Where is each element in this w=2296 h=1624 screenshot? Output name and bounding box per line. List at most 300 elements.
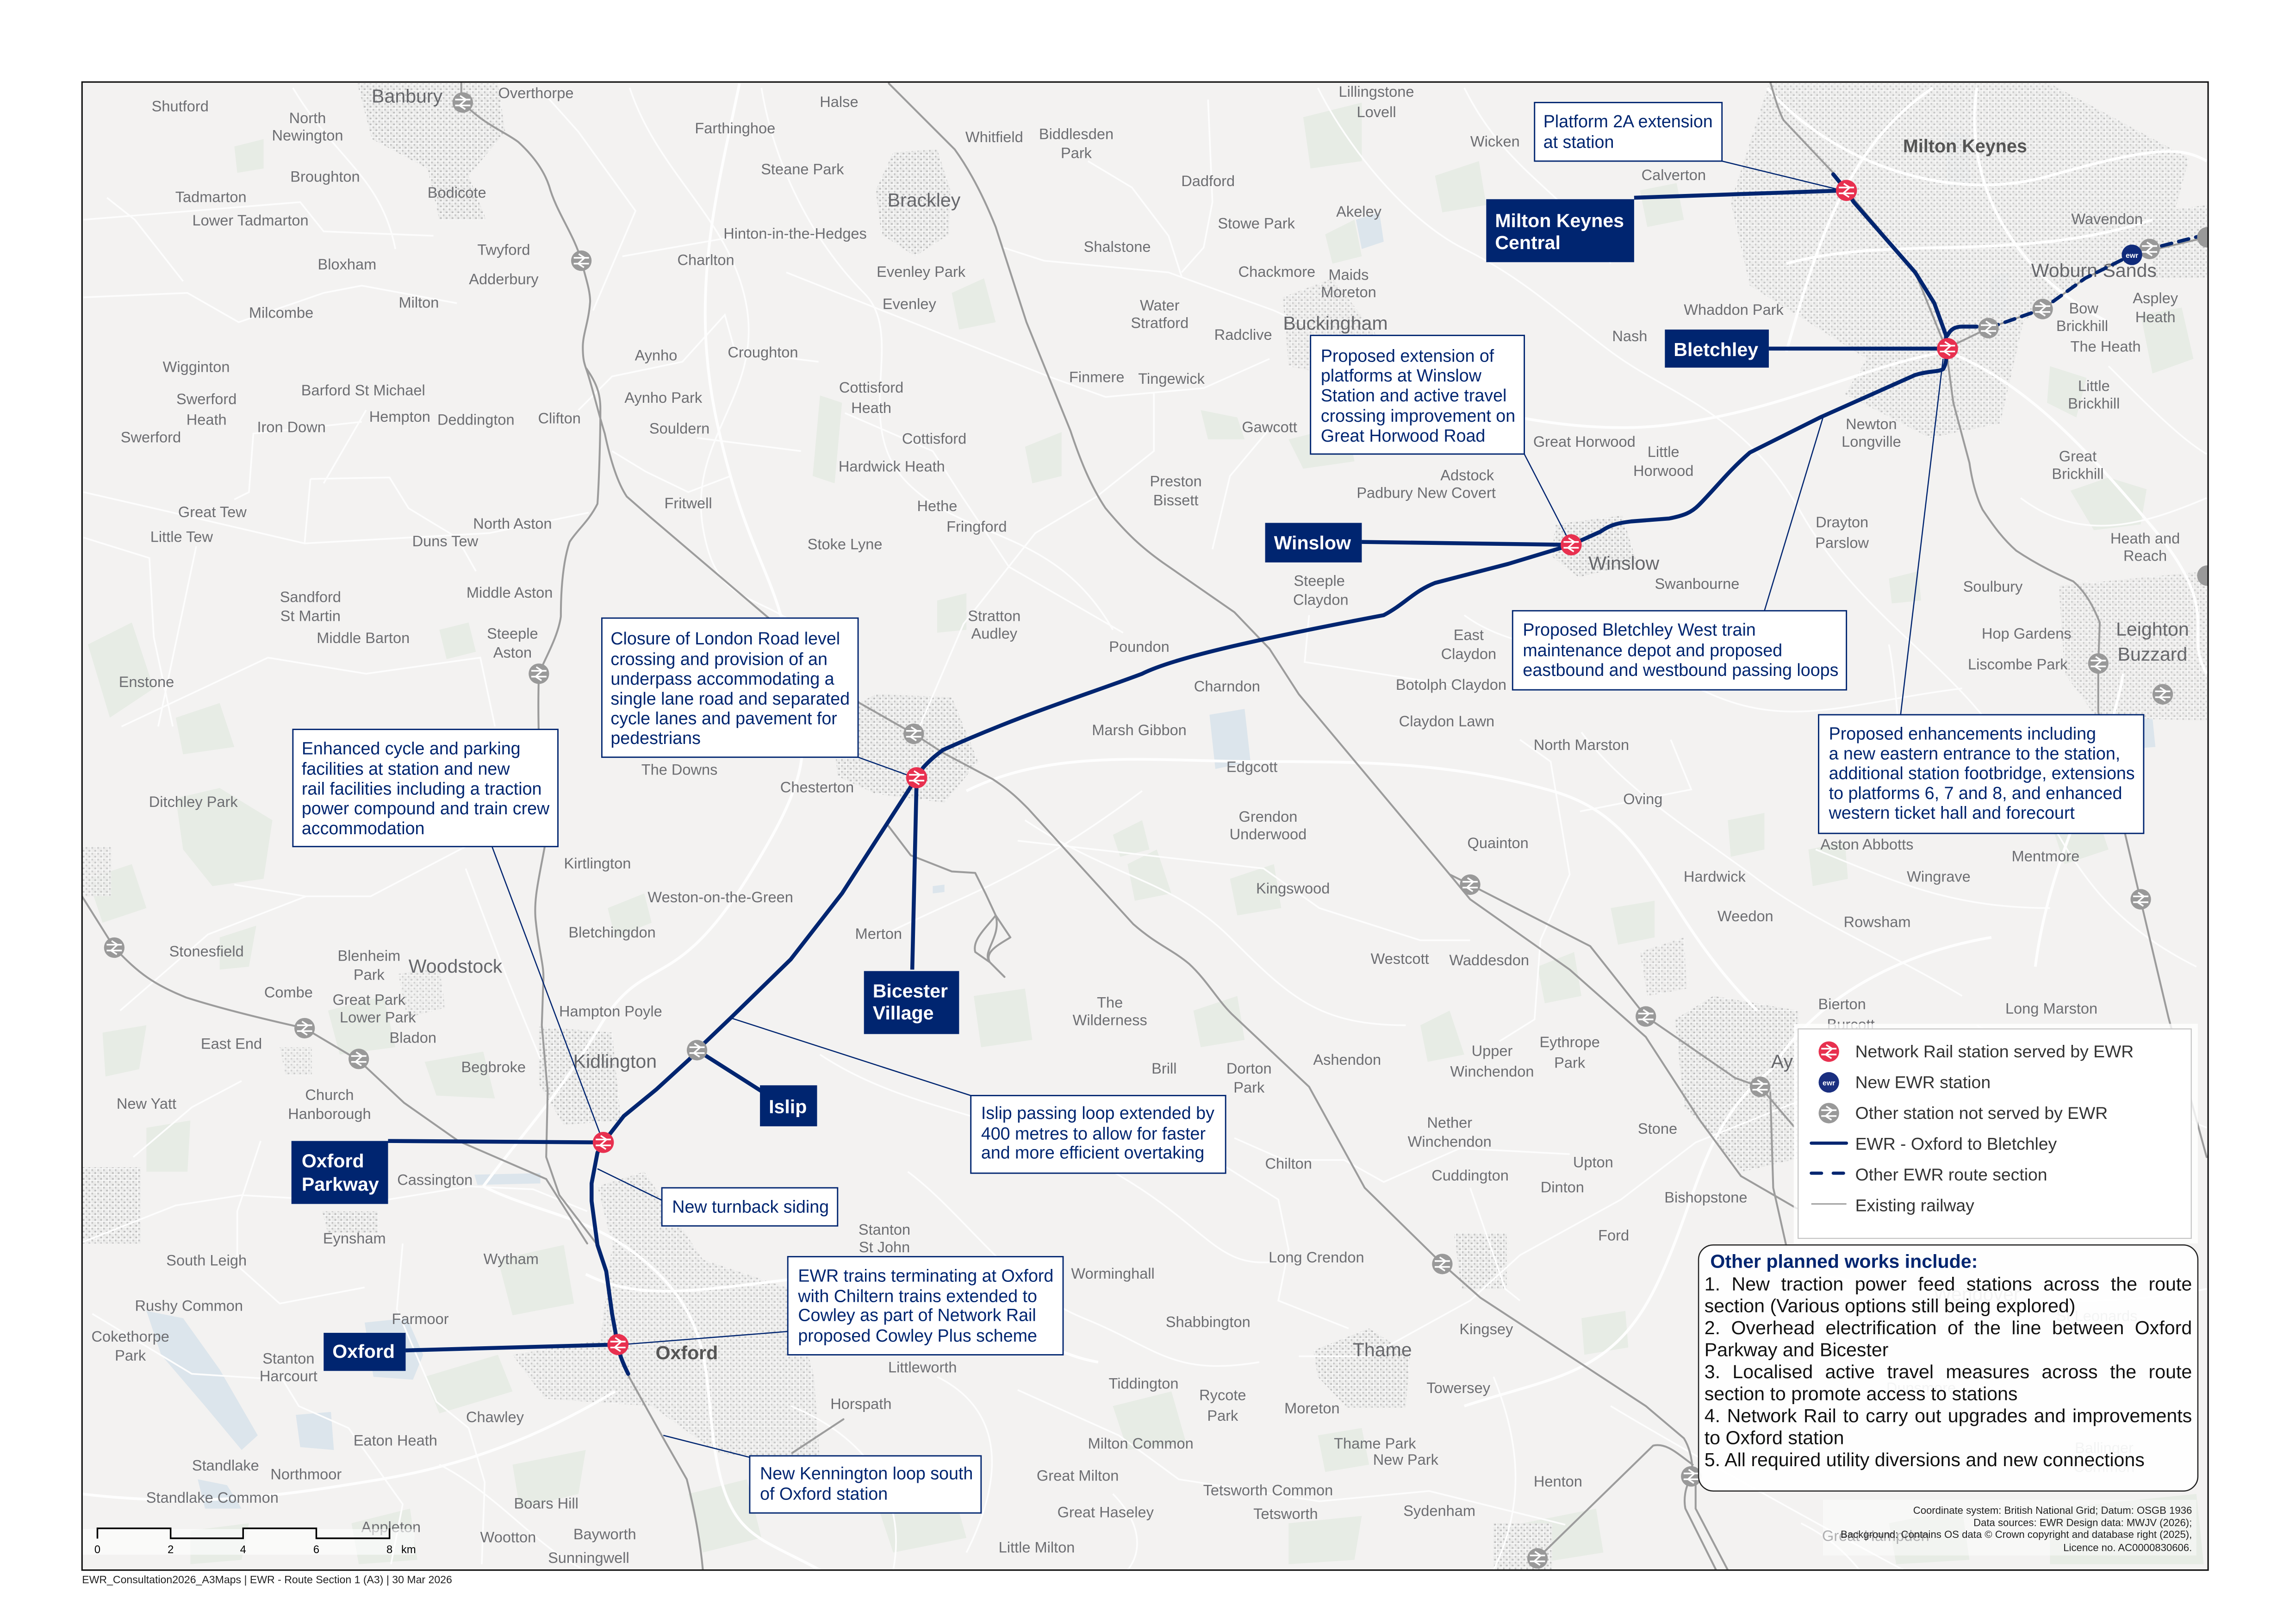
place labels: Oxford <box>656 1342 718 1363</box>
planned works list: section to promote access to stations <box>1705 1383 2017 1405</box>
place labels: Standlake Common <box>146 1489 279 1506</box>
place labels: Adstock <box>1440 467 1494 484</box>
place labels: Wilderness <box>1073 1012 1147 1029</box>
place labels: Sunningwell <box>548 1549 629 1566</box>
callout: Bletchley enhancements: to platforms 6, 7 and 8, and enhanced <box>1829 783 2122 803</box>
place labels: Underwood <box>1230 826 1307 843</box>
place labels: Shutford <box>152 98 209 114</box>
scale bar: 0 <box>94 1544 100 1556</box>
place labels: Sandford <box>280 588 341 605</box>
place labels: Grendon <box>1239 808 1297 825</box>
place labels: Aston <box>493 644 532 661</box>
place labels: Heath <box>2135 309 2176 325</box>
callout: London Road crossing: crossing and provision of an <box>610 649 828 668</box>
place labels: Steane Park <box>761 161 844 177</box>
place labels: Padbury New Covert <box>1356 485 1496 501</box>
place labels: Wigginton <box>163 359 230 375</box>
place labels: Bodicote <box>428 184 486 201</box>
place labels: South Leigh <box>166 1252 247 1269</box>
place labels: Aston Abbotts <box>1820 836 1913 853</box>
place labels: North <box>289 110 326 126</box>
callout: Kennington loop <box>750 1456 981 1513</box>
station label: Bicester Village <box>864 971 959 1034</box>
place labels: Cassington <box>397 1171 473 1188</box>
place labels: Dorton <box>1226 1060 1272 1077</box>
place labels: Barford St Michael <box>301 382 425 399</box>
callout: Bletchley enhancements <box>1819 715 2144 833</box>
callout: Winslow works <box>1311 336 1524 454</box>
place labels: Liscombe Park <box>1968 656 2068 673</box>
callout: Bletchley enhancements: Proposed enhancements including <box>1829 724 2096 743</box>
place labels: St Martin <box>280 607 341 624</box>
faint labels under panels: Wendover <box>1934 1283 2020 1305</box>
planned works list: 3. Localised active travel measures across the route <box>1705 1361 2192 1382</box>
place labels: Woburn Sands <box>2031 260 2157 281</box>
place labels: Shabbington <box>1166 1313 1251 1330</box>
place labels: Milcombe <box>249 305 313 321</box>
station label: Islip <box>760 1085 817 1126</box>
place labels: Woodstock <box>409 956 503 977</box>
place labels: Stanton <box>859 1221 910 1238</box>
place labels: Brackley <box>888 189 961 211</box>
place labels: Soulbury <box>1963 578 2023 595</box>
place labels: Stratford <box>1131 315 1188 331</box>
callout: Oxford Parkway facilities: rail facilities including a traction <box>302 779 541 798</box>
scale bar: 4 <box>240 1544 246 1556</box>
callout: Bletchley enhancements: additional station footbridge, extensions <box>1829 763 2135 783</box>
place labels: Twyford <box>477 241 530 258</box>
leader lines <box>492 161 1943 1457</box>
legend item: new EWR station: ewr <box>1823 1079 1835 1087</box>
place labels: Cuddington <box>1431 1167 1509 1184</box>
callout: London Road crossing <box>602 618 858 757</box>
station label: Milton Keynes Central: Central <box>1495 232 1561 253</box>
place labels: East <box>1454 627 1484 643</box>
place labels: Great Horwood <box>1533 433 1636 450</box>
place labels: Gawcott <box>1242 418 1297 435</box>
place labels: Great Milton <box>1037 1468 1119 1484</box>
place labels: Finmere <box>1069 369 1125 386</box>
callout: London Road crossing: single lane road and separated <box>610 689 850 708</box>
place labels: East End <box>201 1035 262 1052</box>
place labels: Tetsworth Common <box>1203 1482 1333 1499</box>
place labels: Weston-on-the-Green <box>647 889 793 906</box>
place labels: Poundon <box>1109 638 1170 655</box>
place labels: Eythrope <box>1539 1034 1600 1050</box>
callout: London Road crossing: cycle lanes and pavement for <box>610 708 837 728</box>
callout: London Road crossing: pedestrians <box>610 728 701 748</box>
panel: other planned works <box>1699 1245 2198 1491</box>
place labels: Enstone <box>119 674 174 690</box>
callout: Oxford Parkway facilities <box>293 730 558 847</box>
place labels: Buzzard <box>2117 643 2187 665</box>
legend item: other station: Other station not served by EWR <box>1855 1103 2108 1123</box>
place labels: Thame <box>1353 1339 1412 1361</box>
place labels: Newington <box>272 127 343 144</box>
map credits: Data sources: EWR Design data: MWJV (2026); <box>1973 1517 2192 1529</box>
station label: Winslow: Winslow <box>1274 532 1351 553</box>
place labels: Biddlesden <box>1039 126 1114 143</box>
callout: Bletchley enhancements: a new eastern entrance to the station, <box>1829 743 2120 763</box>
callout: London Road crossing: Closure of London Road level <box>610 629 840 648</box>
callout: Oxford Parkway facilities: Enhanced cycle and parking <box>302 738 521 758</box>
place labels: St John <box>859 1239 910 1255</box>
place labels: Akeley <box>1336 203 1382 220</box>
place labels: Little Tew <box>150 529 213 545</box>
planned works list: 4. Network Rail to carry out upgrades and improvements <box>1705 1405 2192 1427</box>
station label: Bletchley <box>1665 330 1769 368</box>
place labels: Bayworth <box>573 1526 636 1543</box>
place labels: Kidlington <box>573 1050 657 1072</box>
place labels: Botolph Claydon <box>1396 676 1506 693</box>
place labels: Great Park <box>333 991 406 1008</box>
place labels: Banbury <box>372 85 443 106</box>
callout: Islip loop <box>971 1096 1226 1173</box>
place labels: Kingswood <box>1256 880 1330 897</box>
station label: Oxford Parkway: Parkway <box>302 1174 379 1195</box>
station label: Islip: Islip <box>769 1096 807 1117</box>
place labels: Heath and <box>2110 530 2180 547</box>
place labels: Wicken <box>1470 133 1520 150</box>
place labels: Farmoor <box>392 1311 449 1327</box>
place labels: Waddesdon <box>1449 952 1529 968</box>
station label: Oxford Parkway <box>292 1141 388 1204</box>
place labels: Tadmarton <box>175 189 247 206</box>
place labels: Swerford <box>176 391 236 407</box>
callout: Platform 2A: at station <box>1543 132 1614 152</box>
place labels: Radclive <box>1214 326 1272 343</box>
place labels: Maids <box>1328 266 1369 283</box>
place labels: Chesterton <box>780 779 854 796</box>
place labels: Winchendon <box>1450 1063 1534 1080</box>
place labels: Hanborough <box>288 1106 371 1122</box>
place labels: Winchendon <box>1408 1133 1492 1150</box>
place labels: The Downs <box>641 762 717 778</box>
faint labels under panels: Great Hampden <box>1822 1527 1929 1544</box>
place labels: Nash <box>1612 328 1647 344</box>
callout: Bletchley West depot: eastbound and westbound passing loops <box>1523 660 1838 680</box>
place labels: Littleworth <box>888 1359 957 1375</box>
place labels: Eynsham <box>323 1230 386 1247</box>
place labels: Rowsham <box>1844 914 1910 931</box>
place labels: Horspath <box>830 1396 892 1412</box>
callout: turnback siding: New turnback siding <box>672 1197 829 1217</box>
place labels: Northmoor <box>270 1466 342 1482</box>
place labels: Great Tew <box>178 504 247 520</box>
callout: Bletchley West depot <box>1512 611 1847 690</box>
place labels: Duns Tew <box>412 533 479 550</box>
place labels: Park <box>115 1347 146 1364</box>
place labels: Milton Common <box>1088 1435 1194 1452</box>
place labels: Claydon <box>1441 646 1496 662</box>
place labels: Great Haseley <box>1058 1504 1154 1521</box>
callout: Oxford trains: Cowley as part of Network Rail <box>798 1305 1036 1325</box>
place labels: Halse <box>820 94 859 110</box>
faint labels under panels: St Leonards <box>2056 1308 2137 1324</box>
place labels: Stratton <box>968 607 1020 624</box>
place labels: Great <box>2059 448 2097 465</box>
place labels: Newton <box>1846 416 1897 432</box>
place labels: Chackmore <box>1238 263 1315 280</box>
place labels: Standlake <box>192 1457 259 1474</box>
place labels: Buckingham <box>1283 312 1388 334</box>
place labels: Brickhill <box>2052 466 2104 482</box>
icon: new EWR station <box>2122 244 2142 265</box>
place labels: New Park <box>1373 1451 1439 1468</box>
place labels: Brickhill <box>2068 395 2120 412</box>
place labels: Whitfield <box>965 129 1023 145</box>
station connector lines <box>388 190 1946 1350</box>
callout: London Road crossing: underpass accommodating a <box>610 669 834 688</box>
place labels: Leighton <box>2116 618 2189 640</box>
place labels: Edgcott <box>1226 758 1277 775</box>
callout: Oxford Parkway facilities: facilities at station and new <box>302 759 510 779</box>
place labels: Steeple <box>487 625 538 642</box>
map credits: Licence no. AC0000830606. <box>2063 1542 2192 1553</box>
place labels: Appleton <box>361 1518 421 1535</box>
place labels: Brill <box>1151 1060 1176 1077</box>
place labels: Shalstone <box>1084 238 1151 255</box>
faint labels under panels: Common <box>2073 1459 2135 1475</box>
scale bar: 2 <box>168 1544 174 1556</box>
place labels: Eaton Heath <box>354 1432 437 1449</box>
place labels: Little <box>2078 378 2110 394</box>
place labels: Lillingstone <box>1339 83 1414 100</box>
place labels: Boars Hill <box>514 1495 579 1512</box>
place labels: Steeple <box>1294 573 1345 589</box>
faint labels under panels: Burcott <box>1827 1016 1875 1033</box>
place labels: Calverton <box>1642 167 1706 183</box>
place labels: Westcott <box>1371 950 1429 967</box>
scale bar <box>82 1528 416 1556</box>
place labels: Parslow <box>1815 534 1869 551</box>
place labels: Hempton <box>369 408 430 425</box>
place labels: North Aston <box>473 515 552 532</box>
scale bar: 8 <box>386 1544 392 1556</box>
map credits <box>1823 1500 2196 1555</box>
place labels: Croughton <box>728 344 798 361</box>
place labels: Deddington <box>437 411 515 428</box>
callout: Platform 2A: Platform 2A extension <box>1543 112 1713 131</box>
place labels: Kirtlington <box>564 855 631 872</box>
callout: Platform 2A <box>1535 102 1722 161</box>
place labels: Adderbury <box>469 271 539 287</box>
place labels: Stowe Park <box>1218 215 1295 232</box>
place labels: Preston <box>1150 473 1202 489</box>
callout: Islip loop: Islip passing loop extended by <box>981 1103 1214 1123</box>
planned works list: 1. New traction power feed stations across the route <box>1705 1272 2192 1294</box>
map credits: Background: Contains OS data © Crown copyright and database right (2025), <box>1841 1529 2192 1540</box>
place labels: North Marston <box>1534 737 1629 753</box>
place labels: Upper <box>1472 1043 1513 1059</box>
place labels: Long Crendon <box>1269 1249 1364 1266</box>
legend item: EWR Oxford to Bletchley: EWR - Oxford to Bletchley <box>1855 1134 2057 1154</box>
planned works list: 2. Overhead electrification of the line between Oxford <box>1705 1316 2192 1338</box>
place labels: Swerford <box>121 429 181 445</box>
place labels: Whaddon Park <box>1684 301 1784 318</box>
place labels: Claydon Lawn <box>1399 713 1494 730</box>
place labels: Combe <box>264 984 313 1001</box>
place labels: Park <box>1554 1054 1586 1071</box>
EWR route: other section solid spur <box>1948 327 1977 336</box>
place labels: Quainton <box>1468 835 1529 851</box>
icon: new EWR station: ewr <box>2126 252 2138 260</box>
place labels: Weedon <box>1717 908 1773 924</box>
place labels: Charlton <box>677 252 734 269</box>
place labels: Bloxham <box>318 256 376 273</box>
place labels: Park <box>1233 1079 1265 1096</box>
place labels: Hop Gardens <box>1982 625 2072 642</box>
place labels: Merton <box>855 925 902 942</box>
place labels: Drayton <box>1816 514 1868 531</box>
callout: Bletchley West depot: maintenance depot and proposed <box>1523 640 1782 660</box>
EWR route: other section dashed <box>1989 234 2207 328</box>
place labels: The Heath <box>2071 338 2141 355</box>
place labels: New Yatt <box>117 1095 176 1112</box>
legend item: other EWR route: Other EWR route section <box>1855 1165 2047 1184</box>
faint labels under panels <box>1771 1016 2137 1544</box>
place labels: Longville <box>1842 433 1901 450</box>
place labels: Thame Park <box>1334 1435 1416 1452</box>
callout: Bletchley enhancements: western ticket hall and forecourt <box>1829 803 2075 823</box>
callout: Winslow works: Proposed extension of <box>1321 346 1494 365</box>
faint labels under panels: Ay <box>1771 1050 1793 1072</box>
place labels: Aspley <box>2133 290 2178 306</box>
place labels: Sydenham <box>1403 1503 1475 1519</box>
place labels: Little <box>1648 443 1680 460</box>
place labels: Henton <box>1534 1473 1582 1490</box>
place labels: Lower Park <box>340 1009 416 1025</box>
place labels: Heath <box>187 411 227 428</box>
place labels: Park <box>354 967 385 983</box>
station label: Oxford <box>324 1333 405 1371</box>
place labels: Little Milton <box>999 1539 1075 1556</box>
place labels: Ford <box>1598 1227 1629 1244</box>
place labels: Stonesfield <box>169 943 244 960</box>
legend <box>1794 1024 2198 1243</box>
place labels: Worminghall <box>1071 1265 1155 1282</box>
place labels: Bladon <box>390 1030 436 1046</box>
place labels: Middle Barton <box>317 630 410 646</box>
place labels: Tingewick <box>1138 370 1205 387</box>
place labels: Broughton <box>290 168 360 185</box>
place labels: Evenley <box>883 296 936 312</box>
place labels: Fritwell <box>664 495 712 512</box>
place labels: Park <box>1061 145 1092 162</box>
place labels: Reach <box>2123 548 2167 564</box>
planned works list: section (Various options still being explored) <box>1705 1294 2075 1316</box>
place labels: Ditchley Park <box>149 793 238 810</box>
callout: Kennington loop: of Oxford station <box>760 1484 888 1504</box>
place labels: Begbroke <box>461 1059 526 1075</box>
place labels: Swanbourne <box>1655 575 1739 592</box>
place labels: Wingrave <box>1907 868 1971 885</box>
faint labels under panels: Ballinger <box>2075 1439 2134 1456</box>
callout: Kennington loop: New Kennington loop south <box>760 1463 973 1483</box>
planned works list: Parkway and Bicester <box>1705 1338 1889 1360</box>
place labels: Aynho Park <box>624 389 703 406</box>
station label: Winslow <box>1265 523 1362 562</box>
place labels: Aynho <box>635 347 677 363</box>
faint labels under panels: Dunsmore <box>1886 1380 1956 1396</box>
place labels: Harcourt <box>260 1368 317 1384</box>
water bodies <box>146 132 2155 1509</box>
place labels: Towersey <box>1426 1380 1491 1396</box>
place labels: Upton <box>1573 1154 1613 1171</box>
EWR route: Oxford to Bletchley <box>591 174 1946 1374</box>
callout: Oxford Parkway facilities: accommodation <box>302 818 424 838</box>
map credits: Coordinate system: British National Grid; Datum: OSGB 1936 <box>1913 1505 2192 1516</box>
place labels: Farthinghoe <box>695 120 775 137</box>
place labels: Blenheim <box>337 947 400 964</box>
station label: Oxford: Oxford <box>332 1341 395 1362</box>
station label: Milton Keynes Central <box>1486 199 1634 262</box>
legend item: existing railway: Existing railway <box>1855 1195 1974 1215</box>
place labels: Moreton <box>1284 1400 1340 1417</box>
callout: Winslow works: Great Horwood Road <box>1321 426 1485 445</box>
place labels: Stanton <box>262 1350 315 1367</box>
station label: Oxford Parkway: Oxford <box>302 1150 364 1172</box>
place labels: Fringford <box>946 518 1007 535</box>
callout: Islip loop: 400 metres to allow for faster <box>981 1124 1206 1143</box>
planned works list: to Oxford station <box>1705 1427 1844 1449</box>
place labels: Tetsworth <box>1253 1505 1318 1522</box>
place labels: Oving <box>1623 791 1662 807</box>
station label: Bicester Village: Village <box>873 1002 933 1024</box>
place labels: Stoke Lyne <box>808 536 882 552</box>
place labels: Wavendon <box>2072 211 2143 227</box>
place labels: Chilton <box>1265 1156 1312 1172</box>
place labels: Hardwick Heath <box>839 458 945 475</box>
place labels: Brickhill <box>2056 318 2108 334</box>
place labels: Church <box>305 1087 354 1103</box>
place labels: Ashendon <box>1313 1051 1381 1068</box>
callout: Winslow works: crossing improvement on <box>1321 406 1515 425</box>
station label: Milton Keynes Central: Milton Keynes <box>1495 210 1624 231</box>
place labels: Bierton <box>1818 996 1866 1012</box>
callout: Oxford trains: with Chiltern trains extended to <box>797 1287 1037 1306</box>
callout: Oxford trains <box>788 1257 1063 1355</box>
place labels: Bishopstone <box>1664 1189 1748 1206</box>
place labels: Nether <box>1427 1114 1472 1131</box>
place labels: Audley <box>971 625 1018 642</box>
legend item: Network Rail station: Network Rail station served by EWR <box>1855 1042 2134 1061</box>
scale bar: km <box>401 1544 416 1556</box>
place labels: Bletchingdon <box>568 924 656 941</box>
place labels: Souldern <box>649 420 709 437</box>
place labels: Clifton <box>538 410 581 426</box>
station label: Bletchley: Bletchley <box>1674 339 1758 360</box>
place labels: Heath <box>851 400 891 416</box>
place labels: Water <box>1140 297 1180 314</box>
place labels: Hethe <box>917 498 957 514</box>
legend item: new EWR station: New EWR station <box>1855 1073 1991 1092</box>
place labels: Wytham <box>484 1250 539 1267</box>
place labels: Park <box>1207 1407 1238 1424</box>
callout: Islip loop: and more efficient overtaking <box>981 1143 1204 1162</box>
place labels: Lower Tadmarton <box>193 212 309 229</box>
place labels: The <box>1097 994 1123 1011</box>
place labels: Cottisford <box>839 379 903 396</box>
place labels: Milton <box>398 294 439 311</box>
planned works list <box>1705 1272 2192 1484</box>
callout: Oxford Parkway facilities: power compound and train crew <box>302 799 550 818</box>
callout: turnback siding <box>662 1188 838 1226</box>
place labels: Horwood <box>1633 462 1693 479</box>
planned works list: 5. All required utility diversions and new connections <box>1705 1449 2145 1471</box>
callout: Oxford trains: EWR trains terminating at Oxford <box>798 1266 1053 1285</box>
place labels: Overthorpe <box>498 85 574 101</box>
